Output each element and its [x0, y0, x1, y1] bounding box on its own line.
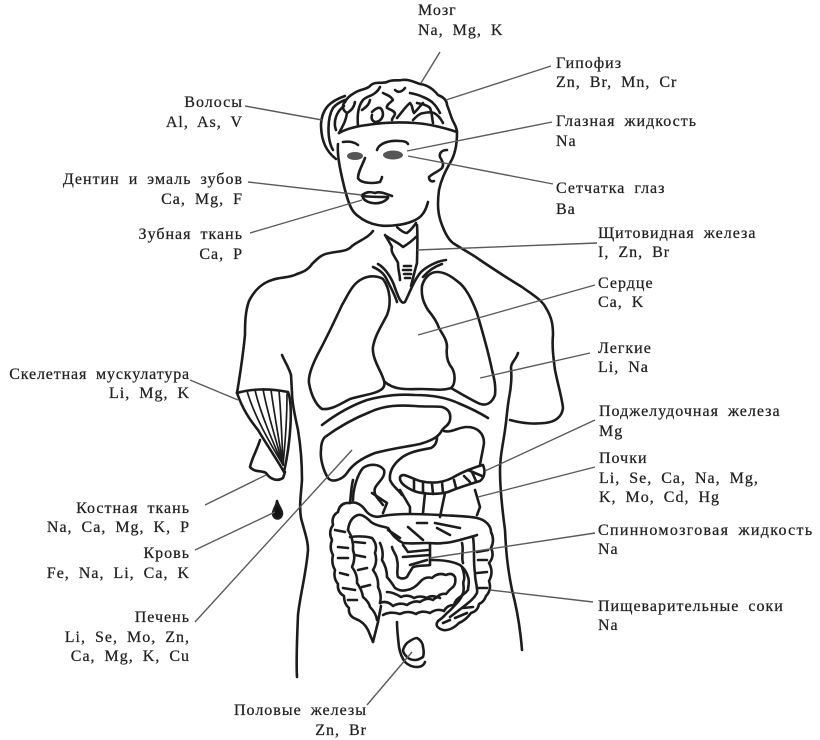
label: eye fluid: Na	[556, 133, 577, 150]
label: thyroid: Щитовидная железа	[598, 225, 756, 242]
label: brain: Мозг	[418, 2, 457, 19]
label: retina: Сетчатка глаз	[556, 180, 665, 197]
hair	[321, 96, 345, 159]
vessels above intestine	[350, 480, 480, 517]
label: skeletal muscle: Скелетная мускулатура	[9, 366, 190, 383]
label: pancreas	[599, 403, 781, 440]
icon: right eye	[383, 150, 403, 160]
label: brain	[418, 2, 503, 39]
label: blood: Fe, Na, Li, Ca, K	[47, 565, 190, 582]
label: thyroid: I, Zn, Br	[598, 244, 670, 261]
label: cerebrospinal fluid: Спинномозговая жидкость	[598, 522, 813, 539]
label: lungs	[598, 340, 652, 376]
label: heart: Сердце	[598, 275, 654, 292]
label: hair: Al, As, V	[166, 114, 243, 131]
stomach	[353, 427, 484, 505]
icon: left eye	[347, 152, 363, 160]
label: dentin and enamel	[63, 171, 243, 208]
torso outline	[237, 260, 563, 677]
label: pancreas: Поджелудочная железа	[599, 403, 781, 420]
label: dentin and enamel: Ca, Mg, F	[161, 191, 243, 208]
label: kidneys	[599, 450, 759, 506]
label: heart: Ca, K	[598, 294, 644, 311]
label: cerebrospinal fluid: Na	[598, 541, 619, 558]
label: dental tissue	[139, 226, 243, 263]
label: pancreas: Mg	[599, 423, 623, 440]
label: skeletal muscle	[9, 366, 190, 402]
label: digestive juices	[598, 598, 784, 634]
body figure	[237, 80, 563, 677]
label: lungs: Легкие	[598, 340, 652, 357]
label: pituitary	[556, 55, 677, 91]
label: eye fluid	[556, 113, 697, 150]
label: digestive juices: Na	[598, 617, 619, 634]
liver	[321, 406, 450, 480]
brows, nose, mouth, ear	[343, 142, 358, 145]
intestines	[330, 502, 493, 642]
label: hair	[166, 94, 243, 131]
label: blood	[47, 545, 190, 582]
thyroid and trachea	[373, 223, 446, 303]
label: gonads: Половые железы	[234, 702, 367, 719]
label: liver: Ca, Mg, K, Cu	[71, 648, 190, 665]
label: thyroid	[598, 225, 756, 261]
label: dentin and enamel: Дентин и эмаль зубов	[63, 171, 243, 188]
label: lungs: Li, Na	[598, 359, 649, 376]
gonad	[397, 622, 425, 667]
label: dental tissue: Ca, P	[199, 246, 243, 263]
icon: blood drop	[273, 501, 282, 518]
label: digestive juices: Пищеварительные соки	[598, 598, 784, 615]
label: hair: Волосы	[184, 94, 243, 111]
label: bone tissue: Na, Ca, Mg, K, P	[47, 519, 190, 536]
label: bone tissue	[47, 500, 190, 536]
head and face	[297, 133, 480, 274]
arm and hand	[237, 389, 291, 480]
label: gonads: Zn, Br	[315, 722, 367, 739]
label: dental tissue: Зубная ткань	[139, 226, 243, 243]
label: pituitary: Zn, Br, Mn, Cr	[556, 74, 677, 91]
pancreas	[400, 465, 484, 494]
label: kidneys: K, Mo, Cd, Hg	[599, 489, 720, 506]
label: kidneys: Li, Se, Ca, Na, Mg,	[599, 470, 759, 487]
label: liver	[65, 609, 190, 665]
label: liver: Li, Se, Mo, Zn,	[65, 629, 190, 646]
label: liver: Печень	[135, 609, 190, 626]
label: bone tissue: Костная ткань	[76, 500, 190, 517]
label: brain: Na, Mg, K	[418, 22, 503, 39]
label: eye fluid: Глазная жидкость	[556, 113, 697, 130]
label: blood: Кровь	[143, 545, 190, 562]
label: gonads	[234, 702, 367, 739]
label: retina: Ba	[556, 201, 576, 218]
label: heart	[598, 275, 654, 311]
leader lines	[190, 52, 597, 705]
lungs and heart	[309, 272, 495, 425]
label: pituitary: Гипофиз	[556, 55, 622, 72]
label: kidneys: Почки	[599, 450, 648, 467]
label: cerebrospinal fluid	[598, 522, 813, 558]
label: skeletal muscle: Li, Mg, K	[109, 385, 190, 402]
brain	[339, 80, 457, 133]
label: retina	[556, 180, 665, 218]
